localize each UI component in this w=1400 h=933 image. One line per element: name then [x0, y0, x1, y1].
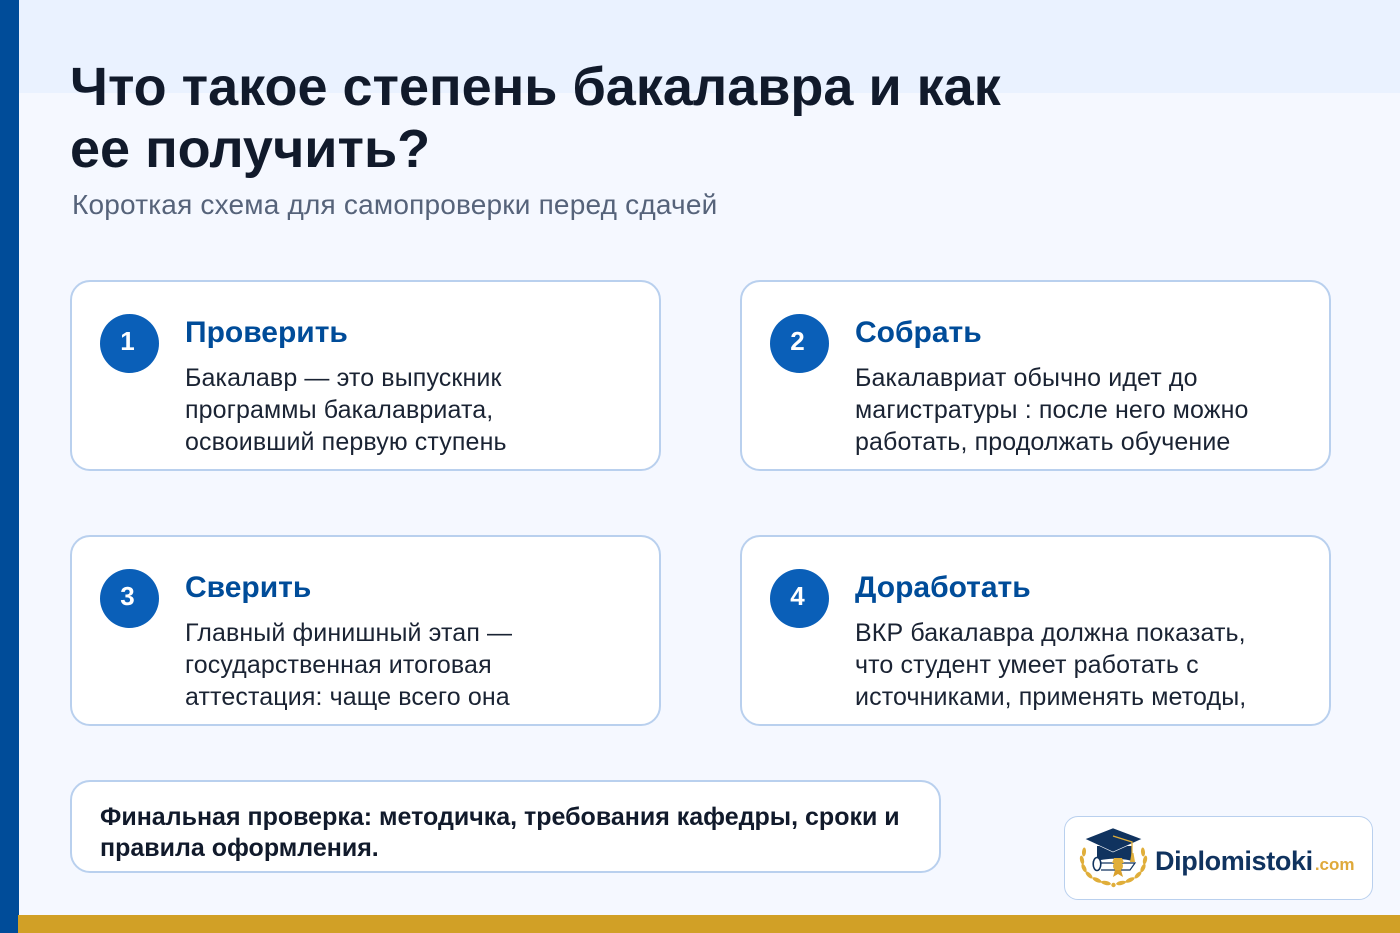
text: step 2: магистратуры : после него можно: [855, 396, 1249, 424]
header band: [19, 0, 1400, 93]
text: step 4: что студент умеет работать с: [855, 651, 1199, 679]
text: step 3: Главный финишный этап —: [185, 619, 512, 647]
step number 1: [100, 314, 159, 373]
text: step 1: освоивший первую ступень: [185, 428, 507, 456]
heading: Проверить: Проверить: [185, 316, 348, 349]
panel: step 4: [740, 535, 1331, 726]
text: step 1: Бакалавр — это выпускник: [185, 364, 502, 392]
heading: Сверить: Сверить: [185, 571, 311, 604]
step number 4: [770, 569, 829, 628]
heading: Доработать: Доработать: [855, 571, 1031, 604]
panel: step 1: [70, 280, 661, 471]
text: step 1: программы бакалавриата,: [185, 396, 493, 424]
final check text: Финальная проверка: методичка, требования кафедры, сроки и: [100, 803, 900, 831]
title: [70, 57, 1001, 179]
bottom gold bar: [18, 915, 1400, 933]
text: step 4: источниками, применять методы,: [855, 683, 1246, 711]
left accent bar: [0, 0, 19, 933]
text: step 2: работать, продолжать обучение: [855, 428, 1230, 456]
icon: graduation cap with laurel: [1080, 828, 1148, 888]
title: Что такое степень бакалавра и как: [70, 57, 1001, 117]
text: step 4: [855, 619, 1246, 711]
text: step 1: [185, 364, 507, 456]
final check text: правила оформления.: [100, 834, 379, 862]
step number 3: 3: [120, 581, 135, 611]
text: step 3: аттестация: чаще всего она: [185, 683, 510, 711]
subtitle: Короткая схема для самопроверки перед сдачей: [72, 189, 717, 220]
final check text: [100, 803, 900, 862]
step number 2: 2: [790, 326, 805, 356]
step number 4: 4: [790, 581, 805, 611]
title: ее получить?: [70, 119, 430, 179]
text: step 2: Бакалавриат обычно идет до: [855, 364, 1198, 392]
text: step 3: [185, 619, 512, 711]
step number 3: [100, 569, 159, 628]
text: step 3: государственная итоговая: [185, 651, 492, 679]
panel: final check: [70, 780, 941, 873]
text: step 2: [855, 364, 1249, 456]
step number 2: [770, 314, 829, 373]
step number 1: 1: [120, 326, 135, 356]
logo wordmark: Diplomistoki.com: [1155, 846, 1355, 876]
text: step 4: ВКР бакалавра должна показать,: [855, 619, 1246, 647]
heading: Собрать: Собрать: [855, 316, 982, 349]
panel: step 3: [70, 535, 661, 726]
panel: logo: [1064, 816, 1373, 900]
panel: step 2: [740, 280, 1331, 471]
